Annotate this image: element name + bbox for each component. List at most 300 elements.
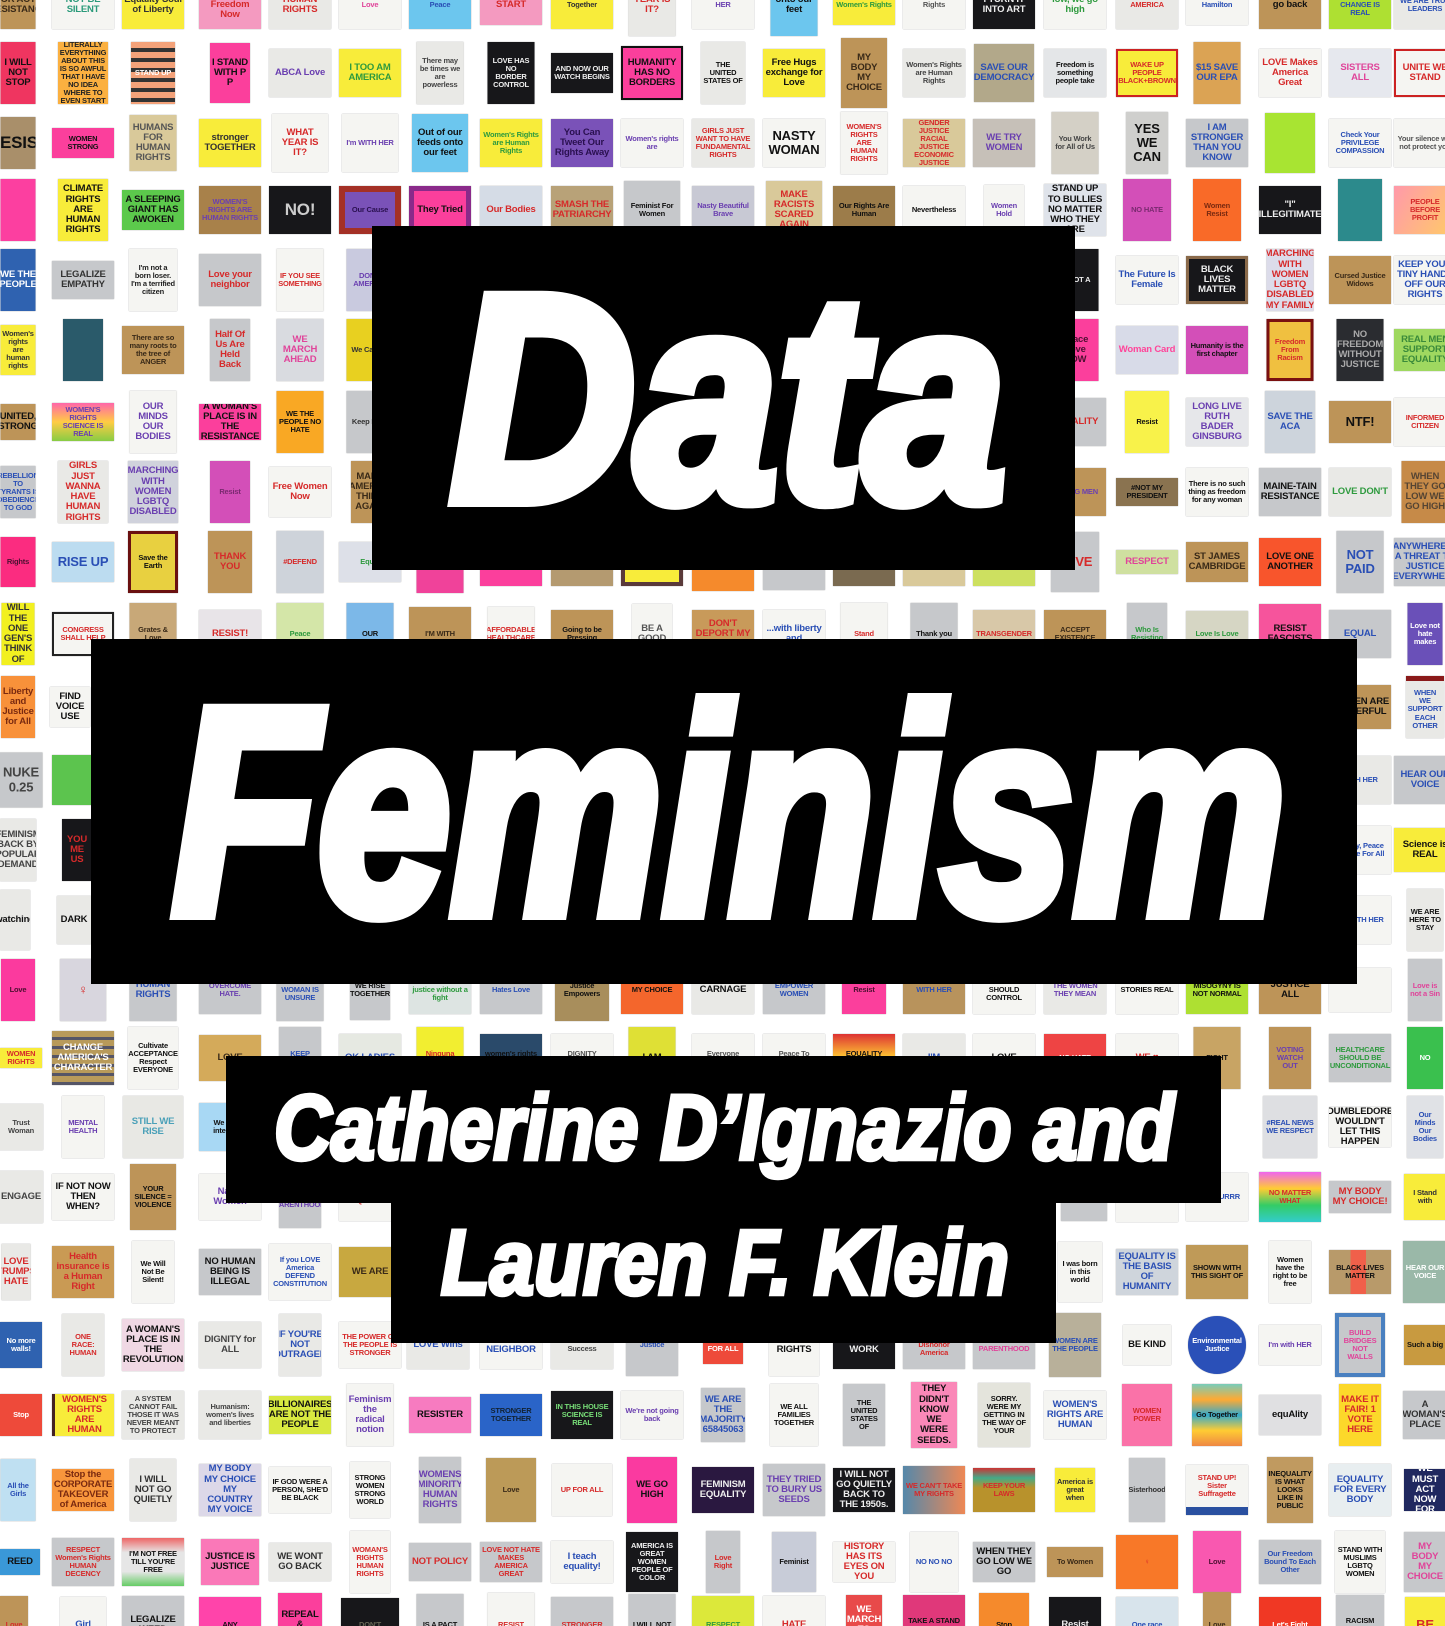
sign row 8: Who do you think [984,553,1024,570]
sign row 15: LOVE [991,1052,1017,1063]
sign row 8: RISE UP [58,554,108,569]
sign row 19: DIGNITY for ALL [204,1334,256,1355]
sign row 1: LOVE Makes America Great [1262,57,1318,88]
sign row 18: NO HUMAN BEING IS ILLEGAL [205,1256,255,1287]
sign row 6: EQUALITY [1052,416,1098,427]
sign row 3: Our Bodies [486,204,536,215]
sign row 15: women's rights are human [485,1049,537,1066]
sign row 9: Stand [854,629,874,638]
sign row 2: GENDER JUSTICE RACIAL JUSTICE ECONOMIC JUSTICE [914,119,954,167]
sign row 19: BUILD BRIDGES NOT WALLS [1344,1328,1376,1361]
sign row 5: Half Of Us Are Held Back [215,328,245,370]
sign row 1: LOVE HAS NO BORDER CONTROL [493,56,529,89]
sign row 17: NO MATTER WHAT [1269,1188,1311,1205]
sign row 9: Love Is Love [1195,629,1239,638]
sign row 2: WHAT YEAR IS IT? [282,127,318,158]
sign row 3: A SLEEPING GIANT HAS AWOKEN [125,194,181,225]
sign row 15: I AM [643,1052,661,1063]
author line: Lauren F. Klein [391,1202,1056,1343]
sign row 15: FIGHT [1206,1053,1228,1062]
sign row 1: SAVE OUR DEMOCRACY [974,62,1034,83]
sign row 8: WITH FEAR [774,557,814,566]
sign row 2: YES WE CAN [1133,121,1161,164]
sign row 14: Hates Love [492,985,530,994]
sign row 1: Free Hugs exchange for Love [766,57,822,88]
sign row 8: Equal [360,557,380,566]
sign row 21: All the Girls [7,1481,29,1498]
sign row 20: WOMEN'S RIGHTS ARE HUMAN [62,1394,107,1435]
sign row 2: WE TRY WOMEN [986,132,1022,153]
sign row 14: MISOGYNY IS NOT NORMAL [1193,981,1241,998]
sign row 14: Resist [853,985,875,994]
sign row 18: Women have the right to be free [1273,1255,1307,1288]
sign row 1: ABCA Love [275,67,325,78]
sign row 22: Love Right [714,1553,732,1570]
sign row 16 [0,1096,1444,1158]
sign row 19: and you Dishonor America [918,1332,950,1357]
sign row 19: Justice [640,1340,664,1349]
sign row 6: WOMEN'S RIGHTS SCIENCE IS REAL [63,405,103,438]
sign row 3: MAKE RACISTS SCARED AGAIN [774,188,814,230]
sign row 8 [0,530,1445,594]
sign row 17: Nasty Women [213,1186,247,1207]
sign row 15: DIGNITY RESPECT [565,1049,599,1066]
sign row 8: THANK YOU [214,551,246,572]
sign row 8: NOT PAID [1345,547,1375,576]
sign row 9: I'M WITH [425,629,455,638]
sign row 4: IF YOU SEE SOMETHING [278,271,322,288]
sign row 17: MY BODY MY CHOICE! [1333,1186,1387,1207]
sign row 9: EQUAL [1344,628,1376,639]
sign row 2: Women's rights are [625,134,679,151]
sign row 8: ST JAMES CAMBRIDGE [1189,551,1245,572]
author line: Catherine D'Ignazio and [226,1056,1221,1203]
sign row 5: WE MARCH AHEAD [283,334,317,365]
sign row 19: It work for the Success [559,1336,605,1353]
sign row 0: AMERICA [1130,0,1164,9]
title box: Data: Data [450,235,1006,563]
sign row 8: Rights [7,557,29,566]
sign row 13: I'm WITH HER [1336,915,1384,924]
sign row 22: I teach equality! [563,1551,601,1572]
sign row 12 [0,818,1445,882]
author box: line 1 and line 2 [226,1056,1221,1343]
sign row 22: Love [1209,1557,1225,1566]
sign row 22: NO NO NO [916,1557,952,1566]
sign row 13: WE ARE HERE TO STAY [1409,907,1441,932]
sign row 21: UP FOR ALL [561,1485,603,1494]
sign row 7: WHEN THEY GO LOW WE GO HIGH [1404,470,1445,512]
sign row 20: STRONGER TOGETHER [491,1406,531,1423]
sign row 15: OK LADIES [345,1052,395,1063]
sign row 2: You Can Tweet Our Rights Away [555,127,609,158]
sign row 19: AY RIGHTS [777,1334,811,1355]
sign row 2: NASTY WOMAN [768,128,820,157]
sign row 2: stronger TOGETHER [204,132,256,153]
sign row 5: Woman Card [1119,344,1175,355]
sign row 14: WITH HER [916,985,952,994]
sign row 15: NO HATE [1059,1053,1091,1062]
sign row 14: CARNAGE [700,984,746,995]
sign row 20: IN THIS HOUSE SCIENCE IS REAL [556,1402,608,1427]
sign row 14: WOMEN SHOULD CONTROL [986,977,1022,1002]
sign row 5 [0,318,1445,382]
sign row 14: JUSTICE ALL [1271,979,1309,1000]
sign row 0: Together [567,0,597,9]
sign row 15: VOTING WATCH OUT [1276,1045,1304,1070]
sign row 14: Love [10,985,26,994]
sign row 1: I WILL NOT STOP [4,57,32,88]
sign row 11 [0,752,1445,808]
sign row 14: WE RISE TOGETHER [350,981,390,998]
sign row 21: IF GOD WERE A PERSON, SHE'D BE BLACK [272,1477,328,1502]
sign row 16: MENTAL HEALTH [68,1118,98,1135]
sign row 3: Women Hold [991,201,1017,218]
sign row 3: "I" ILLEGITIMATE [1259,199,1321,220]
sign row 14: ANY WOMAN IS UNSURE [281,977,319,1002]
sign row 7: MAINE-TAIN RESISTANCE [1261,481,1319,502]
sign row 5: There are so many roots to the tree of ANGER [130,333,176,366]
sign row 2: WOMEN'S RIGHTS ARE HUMAN RIGHTS [847,122,881,163]
sign row 4: Love your neighbor [208,269,252,290]
sign row 20: MAKE IT FAIR! 1 VOTE HERE [1341,1394,1379,1435]
sign row 15: Everyone deserves [707,1049,739,1066]
sign row 5: Women's rights are human rights [2,329,34,370]
sign row 11: WITH HER [1342,775,1378,784]
sign row 21 [0,1456,1445,1524]
sign row 21: MY BODY MY CHOICE MY COUNTRY MY VOICE [204,1464,256,1515]
sign row 10: WHEN WE SUPPORT EACH OTHER [1408,688,1442,730]
sign row 13: DARK [61,914,87,925]
sign row 19: THY NEIGHBOR [486,1334,536,1355]
sign row 0: Rights [923,0,945,9]
sign row 0: Peace [430,0,450,9]
sign row 20 [0,1382,1445,1448]
sign row 9: Peace [290,629,310,638]
sign row 18: EQUALITY IS THE BASIS OF HUMANITY [1118,1250,1176,1292]
sign row 20: WE ALL FAMILIES TOGETHER [774,1402,814,1427]
sign row 18: WE ARE [352,1266,388,1277]
sign row 1: Women's Rights are Human Rights [906,60,962,85]
sign row 10: FIND VOICE USE [56,691,84,722]
sign row 2: Check Your PRIVILEGE COMPASSION [1336,130,1384,155]
sign row 2: WOMEN STRONG [68,134,98,151]
sign row 19: Such a big [1407,1340,1443,1349]
sign row 15: LOVE [217,1052,243,1063]
sign row 1: SISTERS ALL [1340,62,1380,83]
sign row 2: GIRLS JUST WANT TO HAVE FUNDAMENTAL RIGHTS [696,126,750,159]
sign row 4: I'm not a born loser. I'm a terrified citizen [131,263,175,296]
sign row 6: Resist [1136,417,1158,426]
sign row 1: $15 SAVE OUR EPA [1196,62,1238,83]
sign row 1: There may be times we are powerless [420,56,460,89]
sign row 17: YOUR SILENCE = VIOLENCE [134,1184,172,1209]
sign row 8: MARCH [494,556,528,567]
sign row 22: WHEN THEY GO LOW WE GO [976,1546,1032,1577]
sign row 14: STORIES REAL [1121,985,1173,994]
sign row 12: Liberty, Peace Justice For All [1336,841,1384,858]
sign row 1: THE UNITED STATES OF [703,60,743,85]
sign row 7: #NOT MY PRESIDENT [1126,483,1168,500]
sign row 16: STILL WE RISE [132,1116,174,1137]
sign row 16: Trust Woman [8,1118,34,1135]
sign row 9: CONGRESS SHALL HELP [61,625,105,642]
sign row 18: SHOWN WITH THIS SIGHT OF [1191,1263,1243,1280]
sign row 19: No more walls! [6,1336,36,1353]
sign row 14: THE WOMEN THEY MEAN [1053,981,1097,998]
sign row 1: Freedom is something people take [1055,60,1095,85]
sign row 22: RESPECT Women's Rights HUMAN DECENCY [55,1545,111,1578]
sign row 14: EMPOWER WOMEN [775,981,813,998]
sign row 5: NO FREEDOM WITHOUT JUSTICE [1337,328,1383,370]
sign row 21: I WILL NOT GO QUIETLY BACK TO THE 1950s. [836,1468,892,1510]
sign row 3: Nevertheless [912,205,956,214]
sign row 22: JUSTICE IS JUSTICE [205,1551,255,1572]
sign row 6 [0,390,1445,454]
sign row 20: WOMEN'S RIGHTS ARE HUMAN [1047,1399,1103,1430]
sign row 8: RESISTANCE [629,557,675,566]
sign row 8: March [853,557,875,566]
sign row 18: I was born in this world [1062,1259,1098,1284]
sign row 19 [0,1312,1445,1378]
sign row 22: REED [7,1556,33,1567]
sign row 18: BLACK LIVES MATTER [1336,1263,1384,1280]
sign row 14: OVERCOME HATE. [209,981,251,998]
sign row 3: They Tried [417,204,463,215]
sign row 22: Feminist [779,1557,809,1566]
sign row 22: Our Freedom Bound To Each Other [1264,1549,1316,1574]
sign row 22: STAND WITH MUSLIMS LGBTQ WOMEN [1338,1545,1382,1578]
sign row 15: WOMEN RIGHTS [7,1049,35,1066]
sign row 6: NTF! [1346,414,1374,429]
sign row 22: ♀ [1144,1557,1150,1566]
sign row 0 [0,0,1445,36]
sign row 15: WE ♥ [1136,1052,1158,1063]
sign row 16: #REAL NEWS WE RESPECT [1266,1118,1314,1135]
sign row 1: HUMANITY HAS NO BORDERS [628,57,676,88]
sign row 15: EQUALITY EDUCATION [843,1049,885,1066]
sign row 22: WE WONT GO BACK [277,1551,323,1572]
sign row 21: FEMINISM EQUALITY [700,1479,746,1500]
sign row 19: PLANNED PARENTHOOD [979,1336,1029,1353]
sign row 19: CHANNEL WORK [841,1334,887,1355]
sign row 5: Peace Love NOW [1062,334,1088,365]
sign row 21: Stop the CORPORATE TAKEOVER of America [54,1469,112,1510]
sign row 3: SMASH THE PATRIARCHY [553,199,611,220]
sign row 2: Women's Rights are Human Rights [483,130,539,155]
sign row 20: SORRY. WERE MY GETTING IN THE WAY OF YOUR [982,1394,1026,1435]
sign row 17: EQUALITY [1066,1192,1102,1201]
sign row 12: YOU ME US [67,834,87,865]
sign row 15: Cultivate ACCEPTANCE Respect EVERYONE [128,1041,178,1074]
sign row 18: We Will Not Be Silent! [140,1259,166,1284]
sign row 15: Peace To Together [779,1049,809,1066]
sign row 15: NO [1420,1053,1430,1062]
sign row 5: We Cannot [351,345,389,354]
sign row 14: HUMAN RIGHTS [136,979,170,1000]
sign row 9: Thank you [916,629,952,638]
sign row 9: Grates & Love [138,625,168,642]
sign row 9 [1,602,1443,666]
sign row 21: INEQUALITY IS WHAT LOOKS LIKE IN PUBLIC [1268,1469,1312,1510]
sign row 19: WOMEN ARE THE PEOPLE [1052,1336,1098,1353]
sign row 7 [0,460,1445,524]
sign row 19: ONE RACE: HUMAN [70,1332,96,1357]
sign row 11: NUKE 0.25 [3,765,39,794]
sign row 21: America is great when [1057,1477,1093,1502]
sign row 15: CHANGE AMERICA'S CHARACTER [54,1042,112,1073]
sign row 9: OUR [362,629,378,638]
sign row 17: FUTURE [1132,1192,1162,1201]
sign row 8: Save the Earth [138,553,168,570]
sign row 9: TRANSGENDER [976,629,1032,638]
sign row 6: OUR MINDS OUR BODIES [135,400,171,442]
sign row 23 [0,1592,1445,1626]
sign row 8: LOVE [1058,554,1092,569]
sign row 5: Humanity is the first chapter [1191,341,1243,358]
sign row 5: Freedom From Racism [1275,337,1305,362]
sign row 15: I'M [928,1052,940,1063]
sign row 9: RESIST! [212,628,248,639]
sign row 9: ...with liberty and [766,623,822,644]
sign row 7: ORTING MEN [1052,487,1098,496]
sign row 19: JUSTICE FOR ALL [708,1336,738,1353]
sign row 22: AMERICA IS GREAT WOMEN PEOPLE OF COLOR [631,1541,673,1582]
sign row 21: EQUALITY FOR EVERY BODY [1334,1474,1386,1505]
sign row 8: RESPECT [1125,556,1169,567]
sign row 21: THEY TRIED TO BURY US SEEDS [766,1474,822,1505]
sign row 20: A SYSTEM CANNOT FAIL THOSE IT WAS NEVER MEANT TO PROTECT [127,1394,179,1435]
sign row 2: I'm WITH HER [346,138,394,147]
sign row 3: Women Resist [1204,201,1230,218]
sign row 9: Love not hate makes [1410,621,1440,646]
sign row 20: We're not going back [625,1406,679,1423]
sign row 4: IS NOT A [1060,275,1090,284]
sign row 20: THEY DIDN'T KNOW WE WERE SEEDS. [917,1383,951,1446]
sign row 8: LOVE ONE ANOTHER [1266,551,1314,572]
sign row 19: LOVE Wins [413,1339,463,1350]
sign row 14: Love is not a Sin [1410,981,1440,998]
sign row 3: NO! [285,200,315,219]
sign row 0: Women's Rights [836,0,892,9]
sign row 15: HEALTHCARE SHOULD BE UNCONDITIONAL [1330,1045,1390,1070]
sign row 14: assured of justice without a fight [412,977,468,1002]
sign row 6: Keep Love [352,417,388,426]
sign row 4 [0,248,1445,312]
sign row 15: Ninguna persona [426,1049,454,1066]
sign row 17: I Stand with [1413,1188,1437,1205]
sign row 21: STAND UP! Sister Suffragette [1198,1473,1236,1498]
sign row 20: Stop [13,1410,29,1419]
sign row 17: ENGAGE [1,1191,41,1202]
sign row 9: DON'T DEPORT MY FRIENDS [696,618,750,649]
sign row 10: Liberty and Justice for All [2,686,34,727]
sign row 20: Feminism the radical notion [349,1394,391,1435]
sign row 3: Nasty Beautiful Brave [697,201,749,218]
sign row 6: SAVE THE ACA [1267,411,1313,432]
sign row 9: ACCEPT EXISTENCE [1055,625,1095,642]
sign row 9: Going to be Pressing [562,625,602,642]
sign row 7: MARCHING WITH WOMEN LGBTQ DISABLED [128,465,178,517]
sign row 9: BE A GOOD [638,623,666,644]
sign row 1: AND NOW OUR WATCH BEGINS [554,64,610,81]
sign row 3: Feminist For Women [631,201,673,218]
sign row 20: equAlity [1272,1409,1308,1420]
sign row 2 [0,112,1445,174]
sign row 6: INFORMED CITIZEN [1406,413,1444,430]
sign row 3 [0,178,1445,242]
sign row 18: Health insurance is a Human Right [56,1250,110,1292]
sign row 15: KEEP YOUR [290,1049,310,1066]
sign row 1: I STAND WITH P P [212,57,248,88]
sign row 20: THE UNITED STATES OF [850,1398,878,1431]
sign row 8: ♀ [720,557,726,566]
sign row 1: MY BODY MY CHOICE [846,52,882,93]
sign row 3: Our Rights Are Human [839,201,889,218]
sign row 6: WE THE PEOPLE NO HATE [279,409,321,434]
sign row 2: I AM STRONGER THAN YOU KNOW [1191,122,1243,163]
sign row 21: KEEP YOUR LAWS [983,1481,1025,1498]
sign row 17: BOSTON FOR EQUALITY [346,1188,394,1205]
sign row 6: LONG LIVE RUTH BADER GINSBURG [1192,400,1242,442]
sign row 18 [1,1240,1445,1304]
sign row 1 [0,38,1445,108]
sign row 19: THE POWER OF THE PEOPLE IS STRONGER [342,1332,398,1357]
sign row 8: opinion [427,557,453,566]
sign row 14: MY CHOICE [632,985,672,994]
sign row 21: WE CAN'T TAKE MY RIGHTS [906,1481,962,1498]
sign row 3: CLIMATE RIGHTS ARE HUMAN RIGHTS [63,183,103,235]
sign row 14: Justice Empowers [564,981,600,998]
sign row 0: Love [362,0,378,9]
sign row 2: You Work for All of Us [1055,134,1095,151]
sign row 0: Hamilton [1202,0,1232,9]
sign row 22: LOVE NOT HATE MAKES AMERICA GREAT [482,1545,540,1578]
sign row 17 [0,1164,1445,1230]
sign row 7: Resist [219,487,241,496]
sign row 10 [0,676,1444,738]
sign row 4: The Future Is Female [1118,269,1176,290]
sign row 7: GIRLS JUST WANNA HAVE HUMAN RIGHTS [66,461,100,522]
sign row 1: STAND UP [135,68,171,77]
sign row 3: PEOPLE BEFORE PROFIT [1410,197,1440,222]
sign row 3: Our Cause [352,205,388,214]
sign row 9: RESIST FASCISTS [1268,623,1312,644]
sign row 9: Who Is Resisting [1131,625,1163,642]
sign row 16: Our Minds Our Bodies [1413,1110,1437,1143]
sign row 19: I'm with HER [1268,1340,1312,1349]
sign row 0: HER [715,0,731,9]
sign row 22: MY BODY MY CHOICE [1407,1540,1443,1582]
sign row 18: HEAR OUR VOICE [1406,1263,1444,1280]
sign row 1: I TOO AM AMERICA [349,62,391,83]
sign row 3: STAND UP TO BULLIES NO MATTER WHO THEY ARE [1048,184,1102,235]
sign row 21: STRONG WOMEN STRONG WORLD [355,1473,385,1506]
sign row 21: I WILL NOT GO QUIETLY [134,1474,172,1505]
sign row 4: LEGALIZE EMPATHY [60,269,106,290]
sign row 19: BE KIND [1128,1339,1166,1350]
sign row 17: JUST PURRR [1194,1192,1240,1201]
sign row 13 [0,888,1444,952]
sign row 14: ♀ [78,982,88,997]
sign row 7: LOVE DON'T [1332,486,1388,497]
sign row 16: We are all interested [213,1118,247,1135]
sign row 20: RESISTER [417,1409,463,1420]
sign row 22 [0,1530,1445,1594]
sign row 18: If you LOVE America DEFEND CONSTITUTION [273,1255,327,1288]
sign row 3: WOMEN'S RIGHTS ARE HUMAN RIGHTS [202,197,258,222]
sign row 22: To Women [1057,1557,1093,1566]
